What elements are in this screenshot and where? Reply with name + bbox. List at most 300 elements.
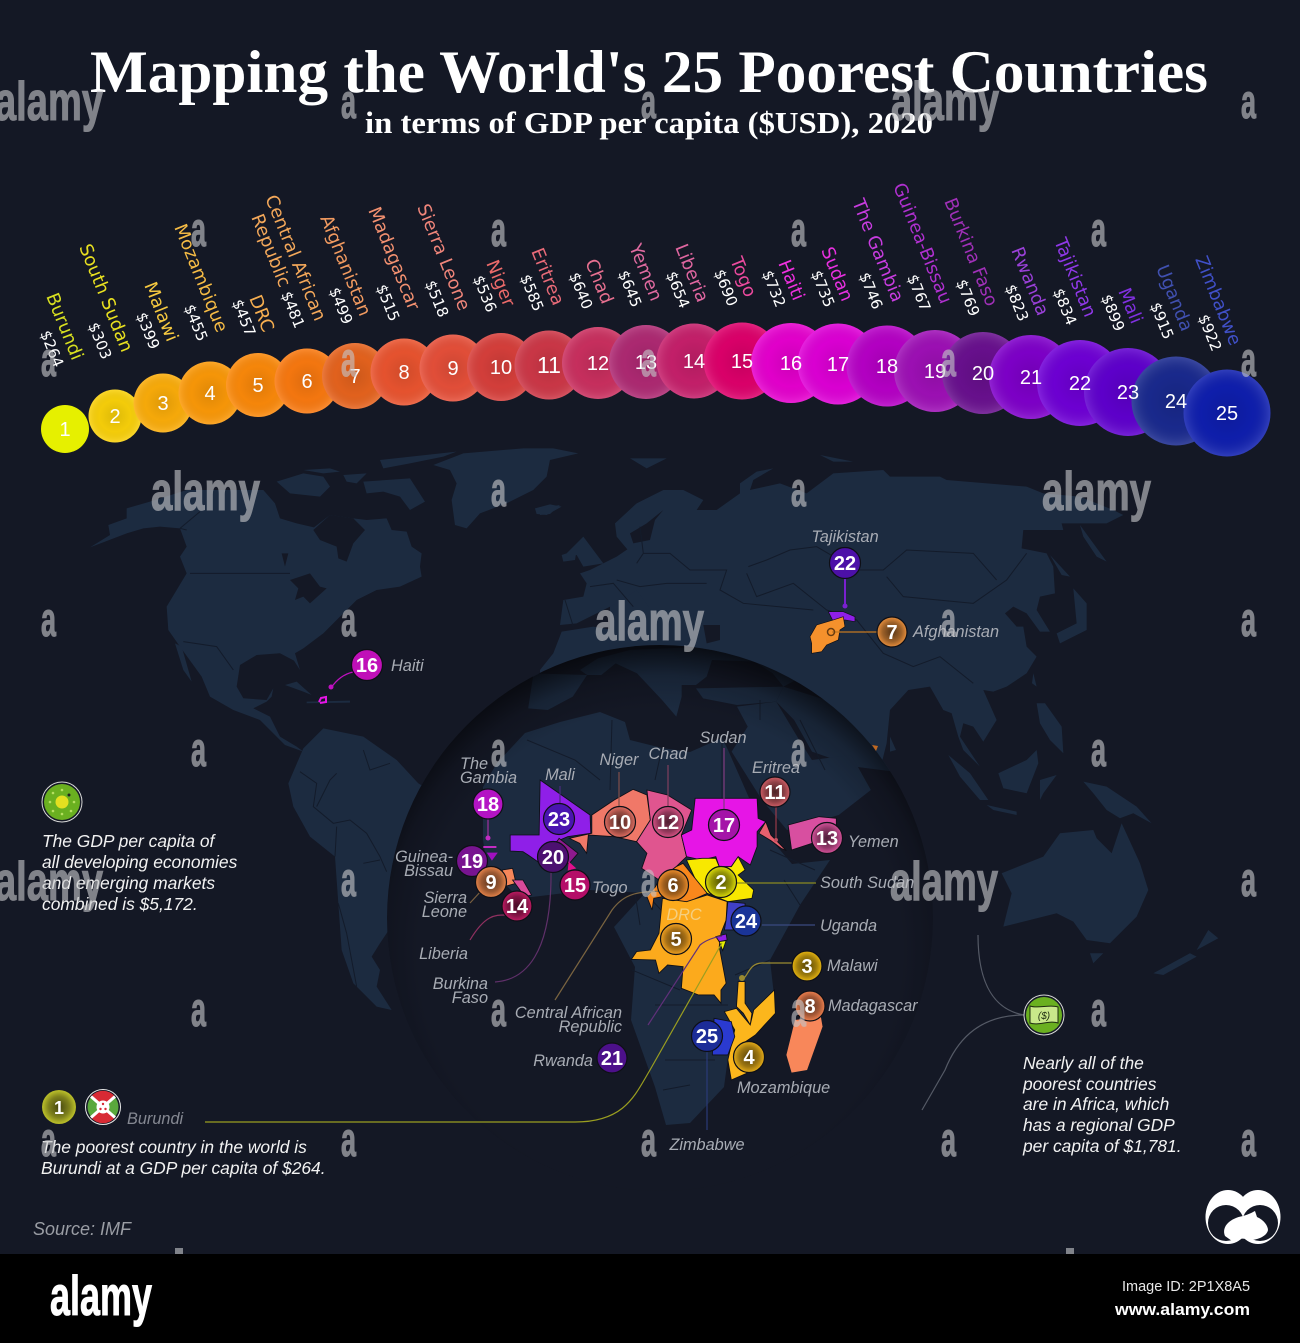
watermarks: a — [791, 464, 806, 517]
rotated GDP values: $536 — [469, 273, 500, 315]
watermarks: alamy — [595, 590, 704, 652]
line: Central African Republic — [555, 891, 662, 1000]
bubble 4 — [178, 362, 242, 424]
line: Tajikistan — [844, 578, 846, 606]
marker 16: 16 — [356, 655, 378, 677]
stock footer bar — [0, 1254, 1300, 1343]
line: Haiti — [331, 672, 353, 688]
map labels: DRC — [666, 906, 702, 924]
map labels: Malawi — [827, 957, 878, 975]
rotated GDP values: $455 — [180, 302, 211, 344]
rotated country names: Malawi — [139, 279, 182, 345]
bubble 2 — [88, 390, 142, 442]
marker 13 — [812, 822, 842, 854]
country: Burkina Faso — [542, 838, 578, 863]
text: poorest country: The poorest country in the world is — [41, 1137, 307, 1157]
outer Africa edge — [540, 627, 707, 707]
country: Central African Republic — [647, 863, 707, 910]
watermarks: a — [1241, 334, 1256, 387]
watermarks: a — [491, 204, 506, 257]
marker 12: 12 — [657, 812, 679, 834]
icon: rank 1 badge — [42, 1090, 76, 1124]
marker 18: 18 — [477, 794, 499, 816]
marker 14 — [502, 891, 532, 921]
bubble 7 — [322, 343, 388, 409]
icon: banknote — [1024, 995, 1064, 1035]
map labels: The — [460, 755, 488, 773]
watermarks: a — [1091, 984, 1106, 1037]
map labels: Burkina — [433, 975, 488, 993]
rotated country names: Burundi — [41, 290, 87, 363]
marker 5: 5 — [670, 929, 682, 951]
watermarks: a — [941, 334, 956, 387]
text: poorest country — [41, 1137, 326, 1178]
Africa countries highlighted — [483, 780, 836, 1080]
country: DRC — [631, 895, 727, 1003]
line: callout Africa lower — [922, 1015, 1024, 1110]
rotated country names: Togo — [725, 253, 760, 300]
line: Uganda — [762, 924, 815, 926]
watermarks: alamy — [891, 70, 999, 132]
map labels: Haiti — [391, 657, 424, 675]
rotated GDP values: $264 — [36, 328, 67, 370]
line: Zimbabwe — [706, 1050, 708, 1130]
rotated country names: Liberia — [670, 241, 713, 305]
map labels: Eritrea — [752, 759, 800, 777]
country: Burundi — [719, 941, 726, 951]
line: Malawi — [744, 963, 792, 978]
country: The Gambia — [483, 846, 496, 848]
rotated country names: Zimbabwe — [1190, 253, 1245, 349]
rotated country names: Central African — [260, 192, 330, 324]
country: Liberia — [513, 880, 532, 897]
rotated GDP values: $499 — [325, 285, 356, 327]
map labels: South Sudan — [820, 874, 914, 892]
bubble 16 — [751, 323, 831, 403]
marker 7: 7 — [886, 622, 898, 644]
bubble rank numbers: 5 — [252, 375, 264, 397]
line: South Sudan — [737, 882, 816, 884]
country: Sudan — [681, 798, 766, 867]
icon: banknote: ($) — [1038, 1011, 1050, 1022]
marker 15 — [560, 870, 590, 900]
leader lines — [205, 578, 1024, 1130]
text: Africa note: has a regional GDP — [1023, 1115, 1175, 1135]
text: Africa note: per capita of $1,781. — [1022, 1136, 1182, 1156]
watermarks: a — [341, 594, 356, 647]
rotated country names: Mali — [1113, 285, 1147, 327]
marker 22: 22 — [834, 553, 856, 575]
rotated country names: Eritrea — [526, 245, 568, 308]
bubble 14 — [656, 324, 732, 398]
rotated country names: Niger — [481, 257, 519, 310]
marker 9: 9 — [485, 872, 497, 894]
marker 23: 23 — [548, 809, 570, 831]
watermarks: a — [191, 984, 206, 1037]
marker 22 — [830, 548, 860, 578]
map labels: Leone — [422, 903, 467, 921]
bubble rank numbers: 20 — [972, 363, 994, 385]
marker 15: 15 — [564, 875, 586, 897]
bubble 24 — [1132, 356, 1220, 446]
rotated GDP values: $645 — [614, 268, 645, 310]
map labels: Afghanistan — [912, 623, 999, 641]
marker 4: 4 — [743, 1047, 755, 1069]
marker 7 — [877, 617, 907, 647]
bubble 22 — [1037, 340, 1123, 426]
bubble rank numbers: 19 — [924, 361, 946, 383]
marker 3 — [792, 951, 822, 981]
bubble 15 — [704, 322, 780, 400]
bubble rank numbers: 21 — [1020, 367, 1042, 389]
country: Afghanistan — [810, 617, 878, 653]
map labels: Republic — [559, 1018, 622, 1036]
rotated GDP values: $690 — [710, 267, 741, 309]
map labels: Rwanda — [533, 1052, 593, 1070]
line: Niger — [618, 772, 620, 808]
inner globe shadow — [391, 645, 928, 874]
marker 23 — [544, 804, 574, 834]
rotated GDP values: $585 — [516, 272, 547, 314]
source: Source: IMF — [33, 1219, 132, 1239]
marker 24: 24 — [735, 911, 758, 933]
country: Yemen — [788, 817, 836, 850]
rotated country names: Rwanda — [1006, 244, 1053, 319]
watermarks: a — [41, 334, 56, 387]
rotated GDP values: $899 — [1097, 292, 1128, 334]
rotated country names — [41, 180, 1245, 363]
country: Mozambique — [724, 990, 775, 1080]
map labels: Yemen — [848, 833, 899, 851]
map labels: Faso — [452, 989, 488, 1007]
country: South Sudan — [687, 857, 754, 902]
icon: Burundi flag — [86, 1090, 120, 1124]
watermarks: alamy — [1042, 460, 1151, 522]
label: Burundi: Burundi — [127, 1110, 184, 1128]
rotated country names: Mozambique — [169, 221, 232, 335]
marker 5 — [660, 924, 692, 954]
rotated country names: Republic — [246, 211, 295, 290]
bubble rank numbers: 1 — [59, 419, 71, 441]
marker 2 — [706, 866, 736, 898]
line: Mali — [559, 786, 561, 805]
bubble rank numbers: 8 — [398, 362, 410, 384]
bubble rank numbers: 12 — [587, 353, 609, 375]
rotated GDP values: $922 — [1194, 312, 1225, 354]
text: developing economies: combined is $5,172. — [42, 894, 198, 914]
map labels: Bissau — [404, 862, 453, 880]
rank bubbles — [41, 322, 1270, 456]
map labels: Niger — [600, 751, 639, 769]
watermarks: a — [491, 984, 506, 1037]
text: developing economies: The GDP per capita of — [42, 831, 217, 851]
marker 17: 17 — [713, 815, 735, 837]
bubble rank numbers: 22 — [1069, 373, 1091, 395]
world map — [90, 448, 1218, 1010]
globe inset: Europe, Middle East and Africa land — [391, 645, 928, 1125]
text: Africa note — [1022, 1053, 1182, 1156]
text: Africa note: are in Africa, which — [1023, 1094, 1169, 1114]
country: Zimbabwe — [712, 1018, 735, 1055]
South America — [288, 728, 447, 1010]
line: Liberia — [470, 915, 505, 940]
marker 8 — [795, 991, 825, 1021]
watermarks: a — [791, 984, 806, 1037]
map labels: Mozambique — [737, 1079, 830, 1097]
bubble rank numbers — [59, 351, 1238, 441]
marker 21: 21 — [601, 1048, 623, 1070]
marker 10: 10 — [609, 812, 631, 834]
bubble 12 — [562, 327, 634, 399]
bubble rank numbers: 25 — [1216, 403, 1238, 425]
watermarks: a — [641, 854, 656, 907]
text: developing economies: all developing economies — [42, 852, 238, 872]
marker 21 — [597, 1043, 627, 1073]
watermarks: a — [791, 724, 806, 777]
bubble 9 — [420, 334, 486, 402]
marker 12 — [652, 806, 684, 838]
text: poorest country: Burundi at a GDP per capita of $264. — [41, 1158, 326, 1178]
country: Madagascar — [786, 1017, 823, 1073]
stock footer bar: Image ID: 2P1X8A5 — [1122, 1278, 1250, 1295]
watermarks: a — [1241, 854, 1256, 907]
map labels: Mali — [545, 766, 575, 784]
map labels: Uganda — [820, 917, 877, 935]
rotated GDP values: $640 — [565, 270, 596, 312]
bubble rank numbers: 18 — [876, 356, 898, 378]
marker 18 — [473, 789, 503, 819]
bubble rank numbers: 13 — [635, 352, 657, 374]
text: developing economies — [42, 831, 238, 914]
bubble rank numbers: 10 — [490, 357, 512, 379]
rotated country names: Yemen — [624, 240, 666, 304]
rotated country names: Haiti — [773, 257, 808, 303]
text: Africa note: poorest countries — [1022, 1074, 1157, 1094]
marker 25 — [692, 1020, 722, 1052]
marker 2: 2 — [715, 872, 727, 894]
bubble 21 — [989, 335, 1073, 419]
country: Uganda — [724, 902, 745, 930]
marker 14: 14 — [506, 896, 529, 918]
bubble 25 — [1184, 370, 1270, 456]
bubble rank numbers: 17 — [827, 354, 849, 376]
bubble rank numbers: 6 — [301, 371, 313, 393]
country: Mali — [510, 780, 591, 863]
rotated GDP values: $767 — [903, 272, 934, 314]
globe inset background — [387, 645, 933, 1191]
rotated country names: Sudan — [816, 244, 857, 304]
watermarks: a — [191, 204, 206, 257]
marker 13: 13 — [816, 828, 838, 850]
bubble rank numbers: 3 — [157, 393, 169, 415]
rotated country names: South Sudan — [74, 241, 137, 355]
rotated country names: Tajikistan — [1049, 234, 1100, 320]
rotated country names: Chad — [580, 256, 617, 307]
rotated country names: Sierra Leone — [412, 201, 474, 314]
icon: rank 1 badge: 1 — [54, 1098, 64, 1118]
bubble rank numbers: 4 — [204, 383, 216, 405]
marker 20 — [538, 842, 568, 872]
rotated GDP values: $515 — [372, 282, 403, 324]
watermarks: a — [1091, 204, 1106, 257]
text: developing economies: and emerging markets — [42, 873, 215, 893]
marker 9 — [476, 866, 506, 898]
country: Haiti — [319, 697, 326, 703]
map labels: Zimbabwe — [668, 1136, 745, 1154]
watermarks: a — [641, 334, 656, 387]
Americas and Greenland — [90, 448, 578, 752]
watermarks: alamy — [151, 460, 260, 522]
watermarks: a — [1241, 76, 1256, 129]
map labels: Gambia — [460, 769, 517, 787]
marker 24 — [731, 906, 761, 936]
bubble 5 — [226, 353, 290, 417]
bubble 11 — [514, 330, 584, 400]
bubble rank numbers: 14 — [683, 351, 705, 373]
marker 11: 11 — [764, 782, 786, 804]
watermarks: a — [941, 594, 956, 647]
rotated GDP values: $481 — [277, 289, 308, 331]
icon: developing economies globe — [42, 782, 82, 822]
bubble 20 — [942, 332, 1024, 414]
watermarks: a — [491, 724, 506, 777]
rotated GDP values: $735 — [807, 268, 838, 310]
Asia islands and Oceania — [890, 525, 1218, 975]
watermarks: alamy — [890, 850, 998, 912]
map labels: Sudan — [699, 729, 747, 747]
subtitle: in terms of GDP per capita ($USD), 2020 — [365, 105, 933, 140]
line: Eritrea — [775, 807, 777, 840]
marker 10 — [604, 806, 636, 838]
country: Sierra Leone — [502, 868, 516, 887]
watermarks: a — [41, 594, 56, 647]
marker 4 — [734, 1042, 764, 1072]
country: Rwanda — [716, 934, 727, 942]
logo — [1206, 1190, 1280, 1244]
Eurasia — [540, 455, 1123, 770]
rotated GDP values: $457 — [228, 297, 259, 339]
rotated GDP values: $915 — [1146, 300, 1177, 342]
map labels: Tajikistan — [811, 528, 879, 546]
watermarks: a — [341, 334, 356, 387]
bubble rank numbers: 15 — [731, 351, 753, 373]
marker 19: 19 — [461, 851, 483, 873]
line: Sudan — [723, 748, 725, 810]
marker 16 — [352, 650, 382, 680]
bubble 10 — [467, 333, 535, 401]
marker 6 — [658, 870, 688, 900]
country: Tajikistan — [828, 612, 855, 622]
line: Rwanda — [648, 936, 722, 1025]
watermarks: a — [1241, 594, 1256, 647]
rotated GDP values: $654 — [662, 269, 693, 311]
map markers — [352, 548, 907, 1073]
bubble rank numbers: 7 — [349, 366, 361, 388]
bubble 6 — [274, 348, 340, 414]
watermarks: a — [41, 1114, 56, 1167]
line: The Gambia — [487, 818, 489, 838]
bubble rank numbers: 24 — [1165, 391, 1187, 413]
watermarks: a — [341, 1114, 356, 1167]
watermarks: a — [1091, 724, 1106, 777]
country: Togo — [568, 862, 576, 871]
rotated GDP values: $746 — [855, 270, 886, 312]
rotated GDP values: $518 — [421, 278, 452, 320]
bubble 8 — [370, 338, 438, 406]
stock footer bar: www.alamy.com — [1114, 1300, 1250, 1319]
line: Sierra Leone — [470, 890, 482, 903]
marker 11 — [760, 777, 790, 807]
rotated country names: DRC — [244, 292, 278, 335]
watermarks: a — [191, 724, 206, 777]
rotated country names: Uganda — [1151, 262, 1197, 334]
text: Africa note: Nearly all of the — [1023, 1053, 1144, 1073]
bubble 19 — [894, 330, 976, 412]
rotated GDP values: $834 — [1049, 286, 1080, 328]
map labels: Madagascar — [828, 997, 918, 1015]
rotated country names: Afghanistan — [315, 212, 375, 319]
stock footer bar: alamy — [50, 1264, 152, 1327]
rotated country names: The Gambia — [847, 195, 908, 305]
line: Burkina Faso — [495, 870, 551, 982]
rotated GDP values — [36, 267, 1225, 370]
map labels: Central African — [515, 1004, 622, 1022]
marker 6: 6 — [667, 875, 679, 897]
watermarks: a — [791, 204, 806, 257]
rotated GDP values: $399 — [132, 310, 163, 352]
bubble 3 — [134, 374, 192, 432]
line: callout Africa upper — [978, 935, 1024, 1015]
map labels: Guinea- — [395, 848, 454, 866]
rotated GDP values: $303 — [84, 320, 115, 362]
country: Guinea-Bissau — [487, 853, 498, 861]
country: Eritrea — [759, 822, 786, 851]
country: Niger — [569, 789, 650, 853]
marker 20: 20 — [542, 847, 564, 869]
bubble rank numbers: 11 — [537, 352, 561, 378]
watermarks: a — [641, 1114, 656, 1167]
map labels: Liberia — [419, 945, 468, 963]
bubble 13 — [609, 325, 683, 399]
map labels: Sierra — [424, 889, 467, 907]
watermarks: a — [491, 464, 506, 517]
line: Burundi — [205, 943, 722, 1122]
watermarks: a — [1241, 1114, 1256, 1167]
bubble rank numbers: 9 — [447, 358, 459, 380]
marker 17 — [708, 810, 740, 840]
bubble 23 — [1084, 348, 1172, 436]
rotated country names: Madagascar — [363, 204, 424, 314]
line: Chad — [667, 765, 669, 808]
map labels — [391, 528, 999, 1154]
watermarks: a — [641, 76, 656, 129]
marker dots — [328, 604, 878, 981]
marker 3: 3 — [801, 956, 813, 978]
watermarks: a — [941, 1114, 956, 1167]
country: Malawi — [736, 982, 752, 1025]
watermarks: a — [341, 854, 356, 907]
country: Chad — [637, 790, 692, 880]
map labels: Chad — [649, 745, 688, 763]
marker 19 — [456, 846, 488, 876]
rotated country names: Burkina Faso — [939, 195, 1002, 309]
marker 8: 8 — [804, 996, 816, 1018]
bubble 1 — [41, 405, 89, 453]
bubble 18 — [846, 326, 928, 406]
bubble rank numbers: 16 — [780, 353, 802, 375]
rotated GDP values: $769 — [952, 277, 983, 319]
map labels: Togo — [592, 879, 628, 897]
